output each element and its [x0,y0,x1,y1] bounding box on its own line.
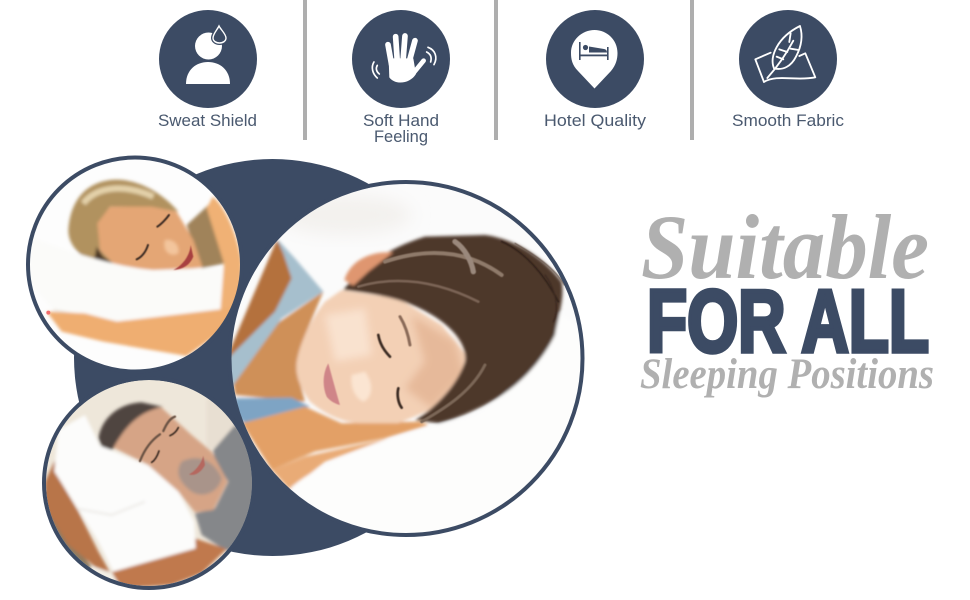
heading: Suitable: Suitable [641,196,929,298]
feature: soft hand feeling [352,10,450,146]
headline [640,196,934,398]
hair [343,235,563,423]
chest [233,292,323,402]
ear [344,252,393,286]
hair [68,180,178,265]
label: sweat shield: Sweat Shield [158,111,257,130]
label: soft hand feeling: Soft Hand [363,111,439,130]
shirt [194,424,252,552]
head [108,408,228,512]
divider 1 [303,0,307,140]
icon: waving hand [372,36,436,83]
pillow [288,310,562,490]
label: soft hand feeling: Feeling [374,127,428,146]
arm: left [43,460,110,572]
divider 3 [690,0,694,140]
back hair [187,205,225,268]
shirt [225,238,323,388]
divider 2 [494,0,498,140]
shoulder [232,240,294,358]
label: hotel quality: Hotel Quality [544,111,647,130]
shoulder [207,197,242,323]
feature: hotel quality [544,10,647,130]
large photo circle: child sleeping [225,182,598,542]
feature: sweat shield [158,10,257,130]
large navy backdrop circle [74,159,471,556]
eyes and mouth [378,317,410,408]
icon: feather on fabric [755,26,815,82]
face [296,290,472,423]
arm [47,307,240,356]
arm: forearm [112,538,227,588]
label: soft hand feeling [363,111,439,146]
feature: smooth fabric [732,10,845,130]
arm [242,407,428,470]
pillow [68,251,225,323]
label: smooth fabric: Smooth Fabric [732,111,845,130]
icon: map pin with bed [571,30,618,88]
backdrop lower left [45,508,112,592]
icon: person with sweat drop [186,23,230,84]
small photo circle: woman sleeping [28,158,242,372]
heading: Sleeping Positions: Sleeping Positions [640,351,934,398]
small photo circle: man sleeping [43,378,262,592]
face [97,207,203,271]
hair [98,402,163,450]
pillow [54,415,196,572]
